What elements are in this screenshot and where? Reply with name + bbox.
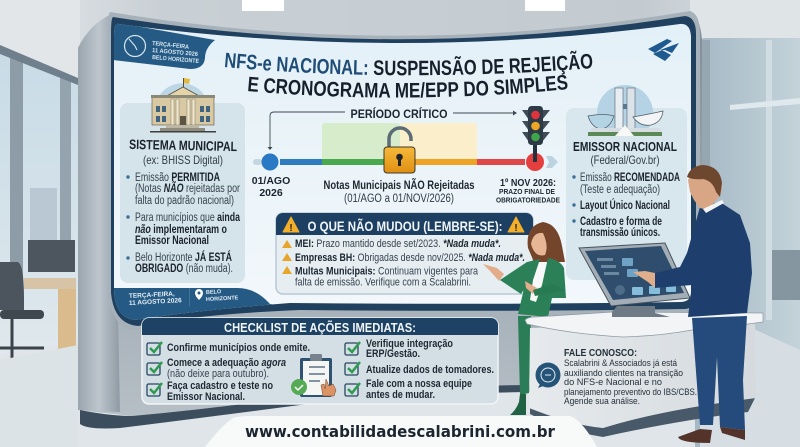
list: rules: falta de emissão. Verifique com a Scalabrini. [295, 276, 471, 288]
list: municipal bullets [126, 172, 240, 275]
contact text: Agende sua análise. [564, 396, 640, 407]
list: municipal bullets: OBRIGADO (não muda). [135, 263, 233, 275]
checklist left column: Comece a adequação agora [167, 357, 286, 369]
list: national bullets: Layout Único Nacional [580, 199, 670, 212]
website bar: www.contabilidadescalabrini.com.br [245, 422, 555, 441]
label: período crítico: PERÍODO CRÍTICO [350, 106, 448, 121]
icon: traffic light [522, 106, 550, 162]
bottom date badge: HORIZONTE [206, 295, 239, 303]
icon: municipal building [150, 78, 216, 132]
date: deadline: OBRIGATORIEDADE [496, 198, 560, 204]
list: national bullets: Cadastro e forma de [580, 216, 662, 228]
list: municipal bullets: Emissor Nacional [135, 235, 209, 247]
checklist right column: Verifique integração [366, 338, 453, 350]
panel: sistema municipal: (ex: BHISS Digital) [143, 153, 223, 167]
website bar [205, 416, 597, 447]
tablet stand [612, 306, 670, 317]
panel: o que não mudou [276, 213, 533, 294]
hand [633, 271, 655, 288]
display casing [78, 11, 702, 428]
timeline [252, 106, 560, 205]
man in suit [633, 165, 752, 443]
top [525, 312, 763, 337]
marker: end [526, 153, 544, 171]
date: start [252, 175, 290, 199]
checkboxes [147, 342, 360, 396]
panel: emissor nacional: (Federal/Gov.br) [590, 153, 660, 167]
header badge with date: BELO HORIZONTE [152, 55, 199, 65]
list: rules: Empresas BH: Obrigadas desde nov/2025. *Nada muda*. [295, 252, 525, 264]
icon: warning right [508, 217, 524, 234]
checklist left column [167, 342, 310, 403]
list: municipal bullets: não implementaram o [135, 224, 227, 236]
holding hand [525, 281, 537, 294]
checklist left column: (não deixe para outubro). [167, 368, 269, 380]
date: deadline [496, 177, 560, 204]
panel: o que não mudou: O QUE NÃO MUDOU (LEMBRE-SE): [308, 217, 502, 234]
checklist right column: ERP/Gestão. [366, 348, 420, 360]
legs [518, 316, 531, 395]
kiosk desk [525, 243, 763, 437]
period text [324, 179, 474, 205]
panel: emissor nacional: EMISSOR NACIONAL [573, 140, 677, 154]
checklist right column [366, 338, 494, 401]
jacket [655, 202, 752, 317]
screen [110, 15, 700, 325]
icon: padlock [384, 128, 415, 173]
base [530, 398, 755, 437]
arrow: to deadline [453, 112, 514, 114]
bottom date badge: TERÇA-FEIRA, [129, 291, 175, 300]
list: municipal bullets: Para municípios que ainda [135, 212, 240, 224]
shoes [678, 429, 712, 443]
pointing hand [483, 264, 504, 281]
contact text: planejamento preventivo do IBS/CBS. [564, 387, 697, 398]
contact text [564, 347, 697, 407]
marker: start [262, 154, 278, 170]
icon: warning left: ! [289, 223, 293, 234]
pointing sleeve [500, 262, 530, 294]
panel: sistema municipal [120, 78, 245, 283]
blouse [530, 263, 544, 303]
panel: checklist: CHECKLIST DE AÇÕES IMEDIATAS: [224, 320, 416, 335]
bottom date badge: BELO [206, 289, 222, 296]
trousers [692, 316, 747, 430]
list: municipal bullets: falta do padrão nacional) [135, 195, 234, 207]
title: NFS-e NACIONAL: SUSPENSÃO DE REJEIÇÃO [225, 50, 592, 76]
header badge with date: TERÇA-FEIRA [152, 41, 190, 51]
contact text: do NFS-e Nacional e no [564, 377, 662, 388]
list: rules: Multas Municipais: Continuam vigentes para [295, 266, 479, 278]
list: national bullets: (Teste e adequação) [580, 184, 660, 196]
face [531, 233, 547, 256]
bottom date badge [114, 288, 272, 320]
body [529, 320, 756, 428]
checklist left column: Emissor Nacional. [167, 391, 245, 403]
list: municipal bullets: Emissão PERMITIDA [135, 172, 220, 184]
list: rules: MEI: Prazo mantido desde set/2023. *Nada muda*. [295, 238, 501, 250]
contact text: auxiliando clientes na transição [564, 368, 683, 379]
header badge with date: 11 AGOSTO 2026 [152, 48, 199, 58]
list: municipal bullets: (Notas NÃO rejeitadas por [135, 182, 240, 195]
date: deadline: 1º NOV 2026: [500, 177, 556, 189]
checklist right column: Atualize dados de tomadores. [366, 364, 494, 376]
panel: checklist [142, 318, 498, 404]
icon: national congress [586, 85, 664, 141]
arrow: to start date [270, 112, 345, 147]
title: E CRONOGRAMA ME/EPP DO SIMPLES [248, 75, 568, 98]
contact text: FALE CONOSCO: [564, 347, 637, 359]
icon: warning left [283, 217, 299, 234]
header badge with date [113, 22, 215, 69]
list: municipal bullets: Belo Horizonte JÁ ESTÁ [135, 251, 232, 264]
period text: Notas Municipais NÃO Rejeitadas [324, 179, 474, 192]
list: national bullets: transmissão únicos. [580, 227, 660, 239]
shoe [510, 394, 526, 415]
checklist right column: Fale com a nossa equipe [366, 378, 472, 390]
date: start: 2026 [259, 187, 283, 199]
checklist left column: Confirme municípios onde emite. [167, 342, 310, 354]
date: deadline: PRAZO FINAL DE [499, 189, 555, 196]
list: rules [282, 238, 525, 288]
contact text: Scalabrini & Associados já está [564, 358, 678, 369]
period text: (01/AGO a 01/NOV/2026) [344, 193, 454, 205]
title [225, 50, 592, 98]
list: national bullets: Emissão RECOMENDADA [580, 172, 680, 184]
icon: clock [124, 36, 146, 56]
list: national bullets [572, 172, 680, 239]
icon: receita federal logo [648, 39, 679, 61]
panel: sistema municipal: SISTEMA MUNICIPAL [129, 137, 237, 154]
checklist right column: antes de mudar. [366, 389, 435, 401]
woman presenter [483, 222, 566, 415]
hair [528, 222, 565, 262]
checklist left column: Faça cadastro e teste no [167, 380, 273, 392]
icon: clipboard [291, 354, 336, 397]
icon: chat bubble [536, 362, 560, 388]
icon: warning right: ! [514, 223, 518, 234]
panel: emissor nacional [566, 85, 687, 280]
hair [687, 165, 722, 197]
bottom date badge: 11 AGOSTO 2026 [129, 297, 182, 307]
head [688, 168, 722, 210]
tablet screen [579, 243, 690, 306]
jacket [518, 258, 566, 317]
collar [703, 200, 724, 213]
date: start: 01/AGO [252, 175, 290, 187]
